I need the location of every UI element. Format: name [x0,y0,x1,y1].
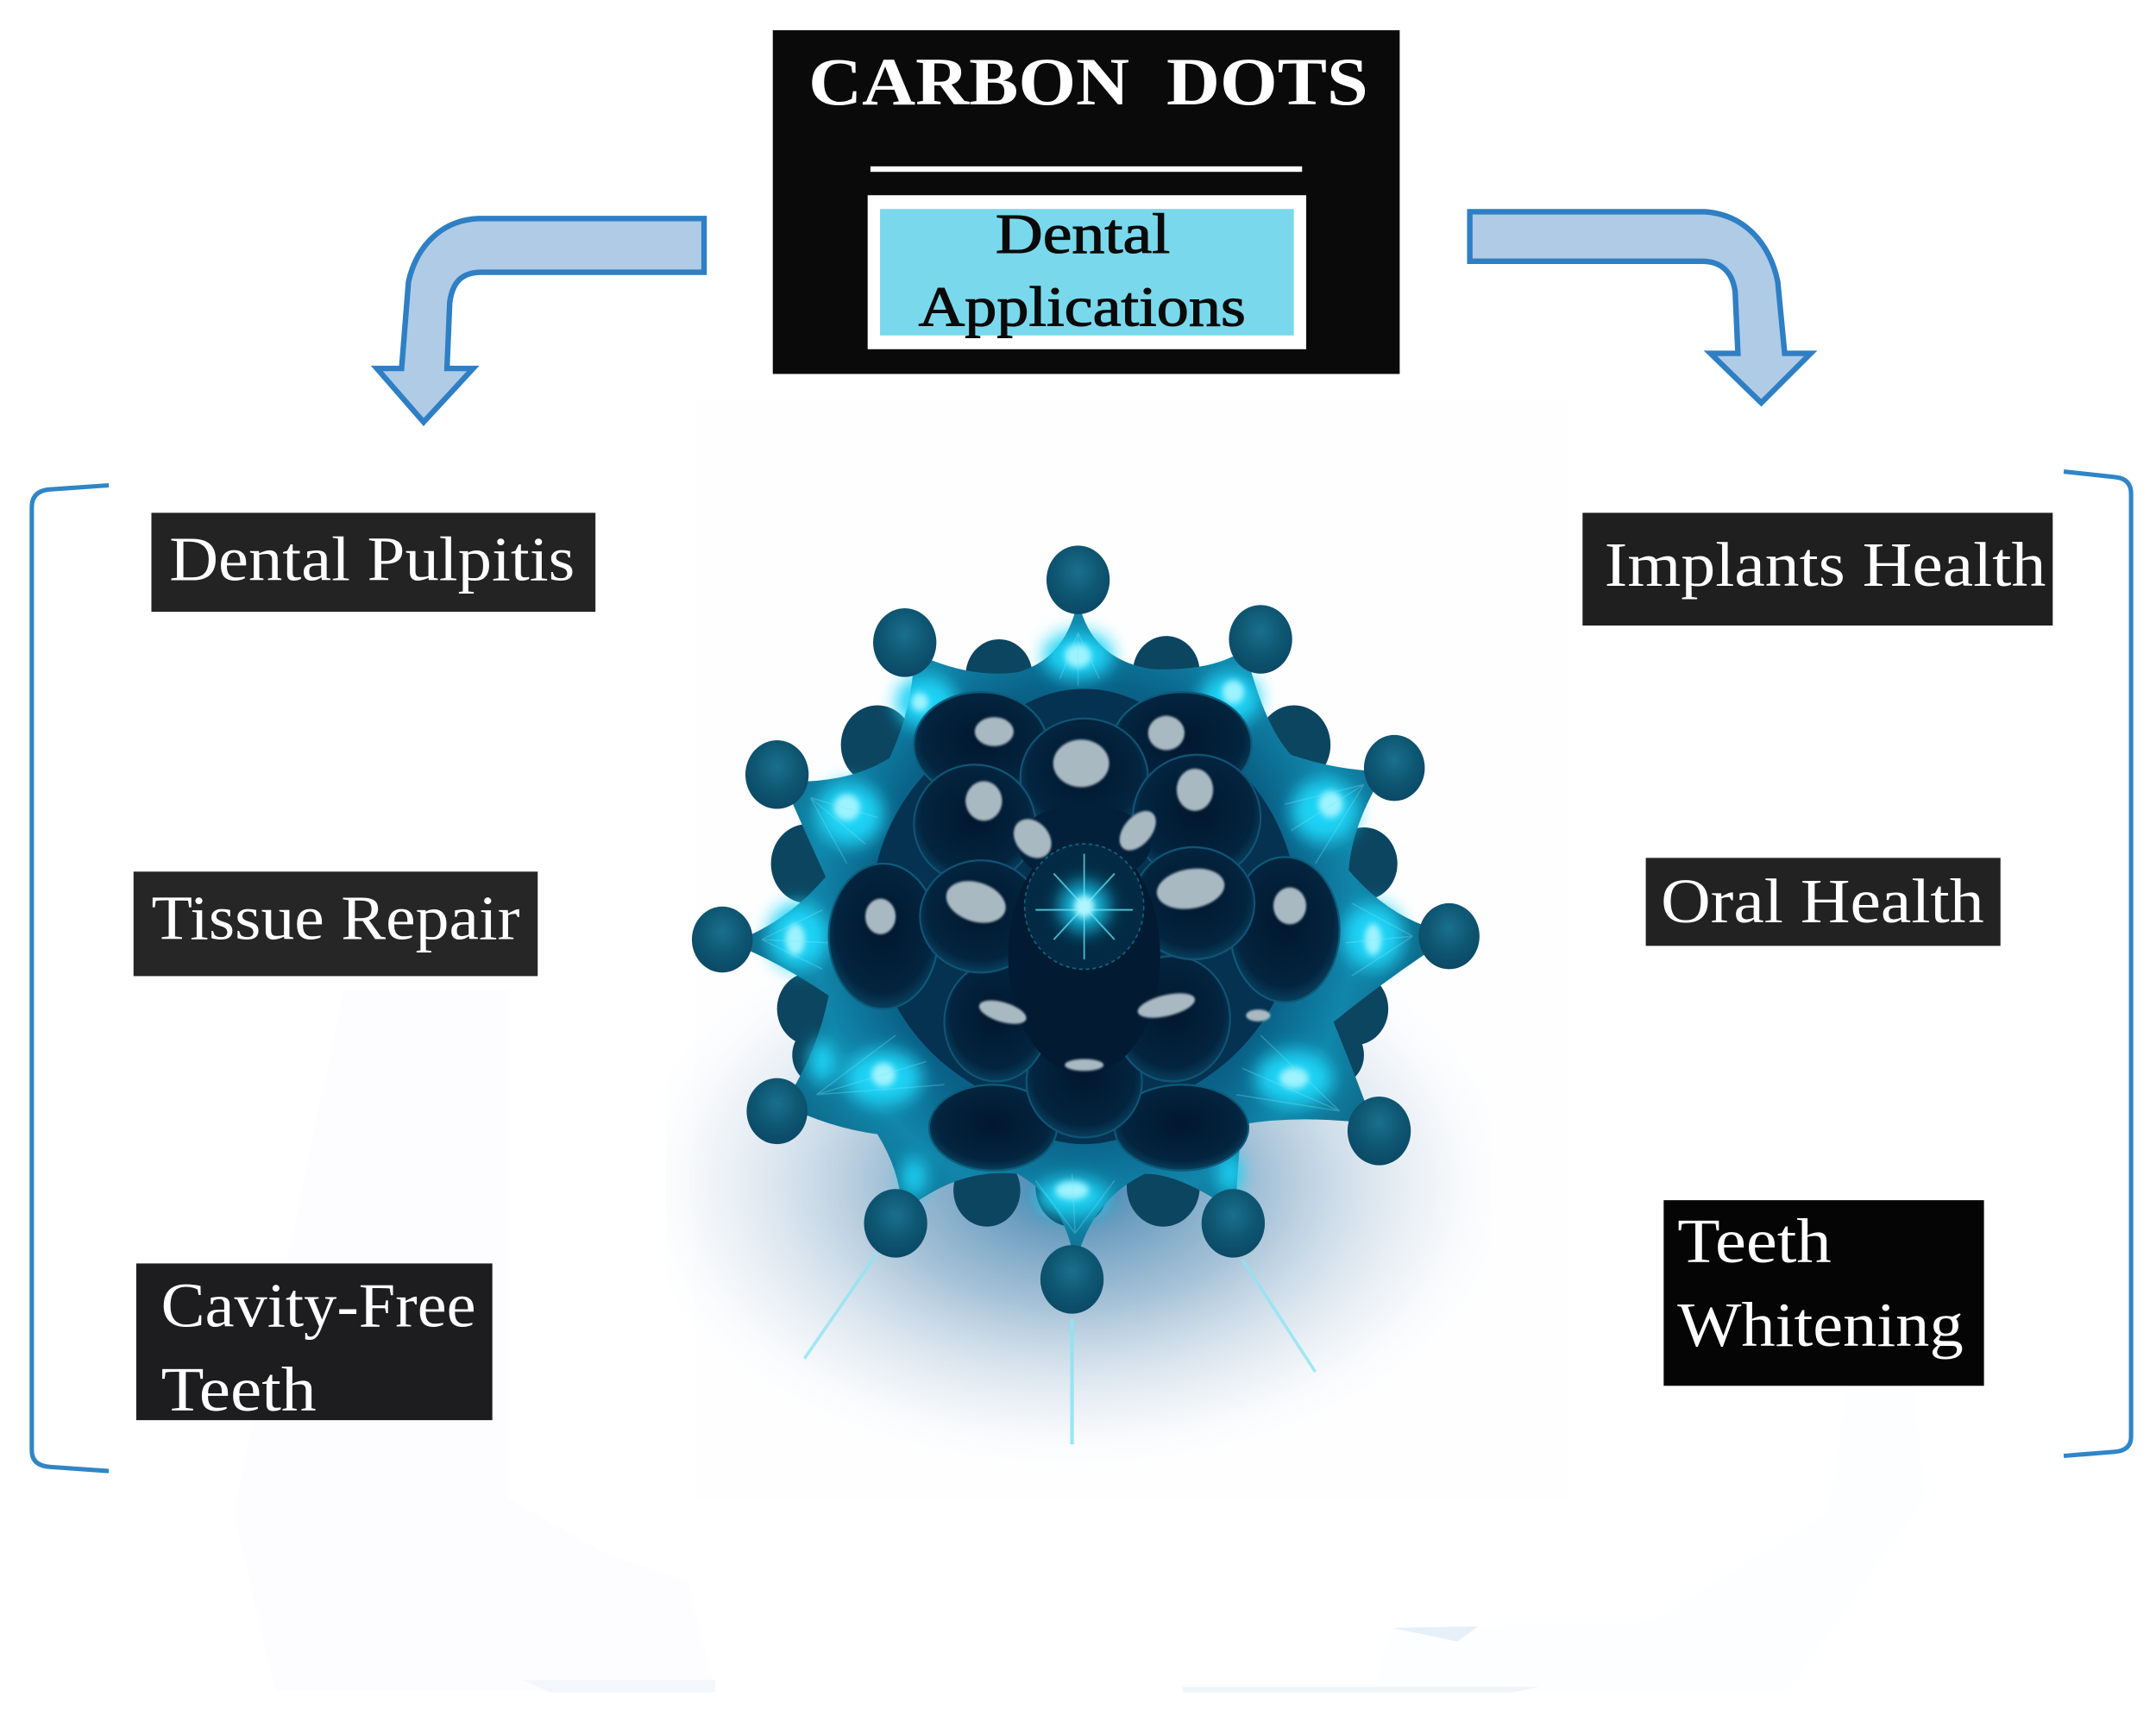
rear bumps [771,636,1398,1227]
light rays [804,1253,1316,1444]
label: Implants Health: Implants Health [1605,530,2046,600]
label: Cavity-Free Teeth: Teeth [161,1355,317,1424]
label: Teeth Whitening: Teeth [1677,1206,1832,1276]
subtitle box: Dental Applications: Dental [996,204,1170,266]
subtitle box: Dental Applications: Applications [919,277,1246,339]
arrow: left [377,218,704,422]
title: CARBON DOTS: CARBON DOTS [808,44,1368,119]
bracket: right [2064,472,2131,1456]
inner lobes [914,719,1260,1137]
spike bulbs [692,545,1480,1314]
arrow: right [1470,211,1811,403]
background: pale haze patches [234,399,1925,1693]
label: Teeth Whitening [1663,1200,1984,1386]
bright glow cores [786,644,1381,1199]
label: Tissue Repair: Tissue Repair [151,883,520,952]
label: Tissue Repair [134,871,537,976]
drop shadow under carbon dot [688,1022,1456,1432]
glow patches [768,632,1404,1216]
body core [871,705,1297,1115]
title panel [773,30,1399,374]
label: Cavity-Free Teeth: Cavity-Free [161,1271,476,1341]
label: Implants Health [1582,512,2052,625]
subtitle box: Dental Applications [868,195,1306,349]
grey highlights [865,716,1306,1071]
outer lobes [829,692,1340,1171]
arm fibres [762,632,1412,1233]
label: Cavity-Free Teeth [136,1263,493,1424]
spiked star body [732,600,1437,1267]
illustration: carbon dot particle [692,545,1480,1444]
bracket: left [32,486,109,1471]
label: Dental Pulpitis [151,512,595,612]
label: Dental Pulpitis: Dental Pulpitis [169,524,575,594]
label: Teeth Whitening: Whitening [1677,1290,1964,1360]
central dark fill [1009,837,1160,1075]
label: Oral Health [1646,858,2001,946]
label: Oral Health: Oral Health [1661,866,1984,936]
central sparkle [1025,844,1144,969]
